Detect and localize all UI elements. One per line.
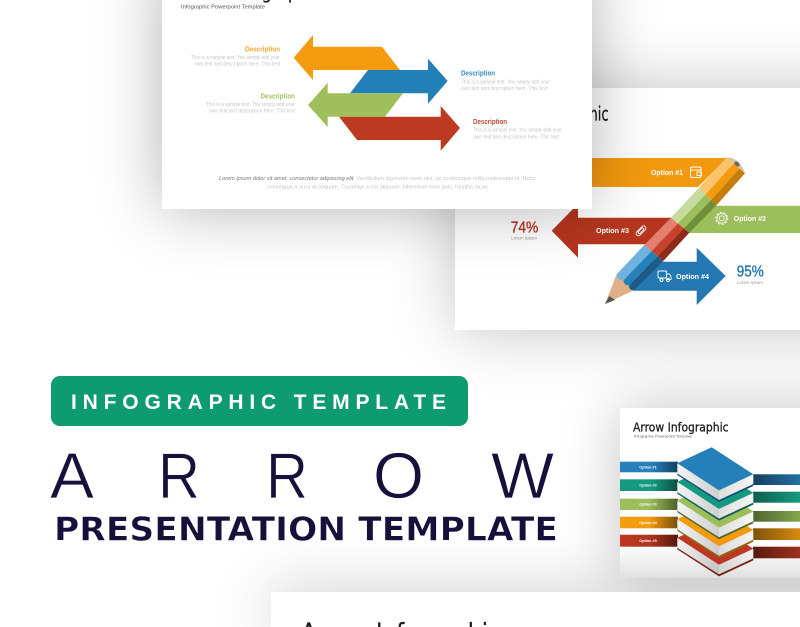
stat: 95%: Lorem Ipsum: [737, 280, 764, 285]
stat: 95%: [737, 264, 764, 285]
left option bars: Option #3: [639, 503, 657, 507]
title: [301, 619, 500, 627]
label: option 3: Option #3: [596, 226, 629, 235]
stat: 95%: 95%: [737, 264, 764, 281]
heading: ARROW: A: [50, 439, 95, 512]
left option bars: Option #5: [639, 539, 657, 543]
arrow: option 4: [630, 248, 726, 305]
book: teal: [677, 466, 753, 521]
label: option 2: Option #2: [734, 214, 766, 223]
subtitle: Infographic Powerpoint Template: [181, 4, 265, 10]
icon: truck: [658, 271, 671, 282]
text: footer note: consequat a urna at aliquam. Curabitur a est aliquam, bibendum eros quis, fringilla lacus: [267, 184, 488, 190]
arrow: red right: [339, 106, 460, 151]
heading: ARROW: O: [373, 439, 424, 512]
label: option 4: Option #4: [676, 272, 710, 281]
text: blue description: This is a sample text. You simply add your: [461, 79, 550, 85]
book: blue: [677, 447, 753, 502]
heading: ARROW: W: [491, 439, 555, 512]
text: blue description: own text and description here. This text: [461, 86, 548, 92]
text: orange description: [191, 45, 281, 68]
heading: ARROW: R: [158, 439, 200, 512]
left option bars: Option #4: [639, 521, 658, 525]
stat: 74%: Lorem Ipsum: [511, 236, 538, 240]
text: red description: [473, 117, 562, 140]
text: green description: own text and description here. This text: [209, 108, 296, 114]
book: orange: [677, 503, 753, 558]
book: green: [677, 484, 753, 539]
arrow: option 3: [552, 204, 672, 258]
text: green description: [206, 91, 296, 114]
left option bars: Option #1: [639, 465, 657, 469]
pencil: [605, 157, 745, 304]
arrow: green left: [308, 83, 403, 127]
subheading: PRESENTATION TEMPLATE: [54, 511, 558, 549]
heading: ARROW: [50, 439, 555, 512]
icon: wallet: [690, 167, 702, 178]
text: blue description: Description: [461, 69, 495, 78]
text: footer note: Lorem ipsum dolor sit amet, consectetur adipiscing elit.: [219, 176, 355, 182]
icon: paperclip: [635, 225, 647, 237]
arrow: blue right: [350, 59, 448, 104]
heading: ARROW: R: [266, 439, 308, 512]
book: red: [677, 522, 753, 576]
icon: gear: [716, 212, 728, 224]
badge: INFOGRAPHIC TEMPLATE: [71, 391, 446, 414]
panel: pencil arrow slide: [455, 88, 800, 330]
subtitle: Infographic Powerpoint Template: [634, 434, 693, 438]
arrow: orange left: [294, 35, 400, 80]
badge: [51, 376, 468, 426]
panel: stacked books arrow slide: [620, 408, 800, 578]
text: red description: own text and description here. This text: [473, 134, 560, 140]
arrow: option 2: [688, 206, 800, 233]
text: red description: This is a sample text. You simply add your: [473, 128, 562, 134]
left option bars: Option #2: [639, 484, 657, 488]
stat: 74%: 74%: [511, 220, 538, 237]
title: Arrow Infographic: [493, 103, 608, 126]
label: option 1: Option #1: [651, 168, 683, 177]
text: footer note: Vestibulum dignissim nunc nisi, ac scelerisque nulla malesuada id. Nunc: [356, 176, 536, 182]
panel: bottom partial slide: [271, 592, 800, 627]
text: orange description: This is a sample text. You simply add your: [191, 55, 280, 61]
text: green description: This is a sample text. You simply add your: [206, 102, 295, 108]
arrow: option 1: [455, 158, 727, 187]
right arrow tails: [753, 474, 800, 558]
title: Arrow Infographic: [633, 420, 729, 434]
left option bars: [620, 462, 678, 547]
text: orange description: Description: [245, 45, 280, 54]
text: green description: Description: [260, 91, 295, 100]
text: footer note: [219, 176, 536, 190]
panel: four arrows slide: [162, 0, 592, 209]
text: blue description: [461, 69, 550, 92]
text: red description: Description: [473, 117, 507, 126]
text: orange description: own text and description here. This text: [194, 62, 281, 68]
